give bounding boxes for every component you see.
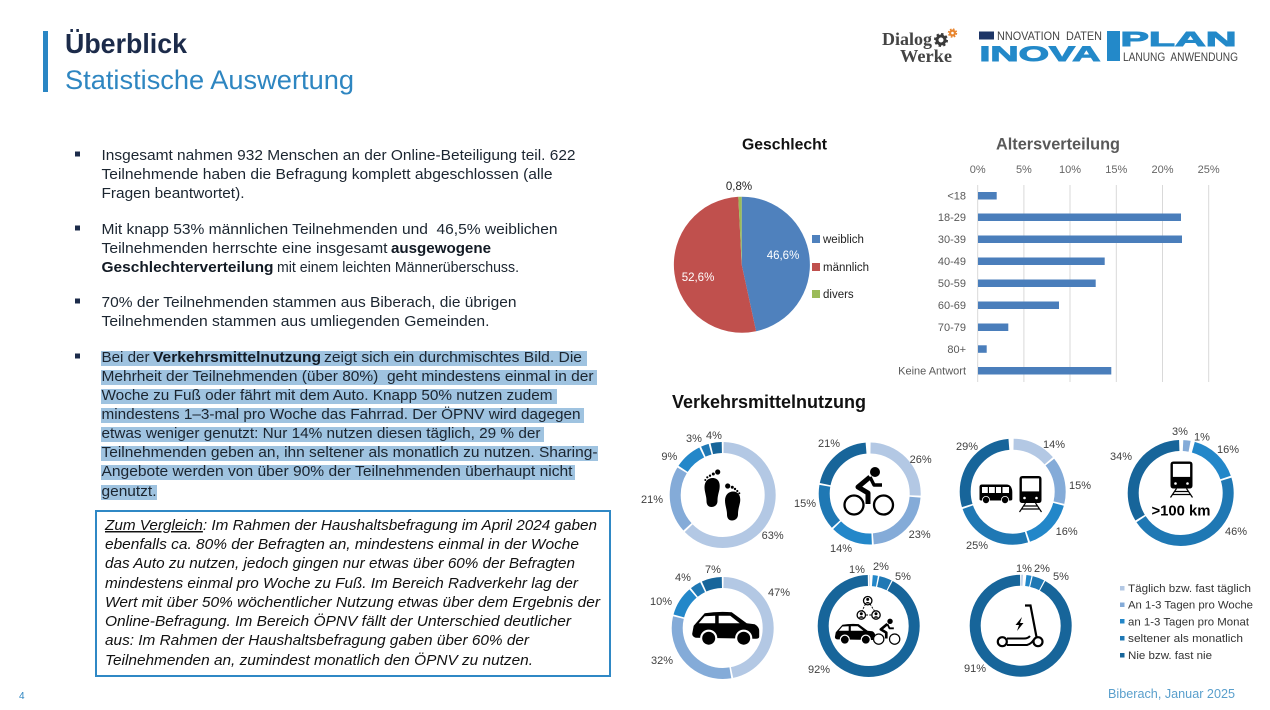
icon: train bbox=[1020, 476, 1042, 512]
donut: Fahrrad: 14% bbox=[830, 543, 852, 555]
bullet: Verkehrsmittelnutzung (highlighted): Bei der bbox=[102, 350, 150, 366]
icon: bike sharing bbox=[874, 619, 900, 644]
heading: Geschlecht: Geschlecht bbox=[742, 136, 828, 154]
bar chart: Altersverteilung: 50-59 bbox=[938, 278, 966, 290]
page number: 4 bbox=[19, 691, 25, 702]
logo: Dialog Werke: Dialog bbox=[882, 29, 932, 49]
donut: Fernverkehr über 100 km: 34% bbox=[1110, 451, 1132, 463]
bar chart: Altersverteilung: 20% bbox=[1151, 164, 1174, 176]
donut: Sharing Auto und Rad: 92% bbox=[808, 664, 830, 676]
donut: zu Fuß: 4% bbox=[706, 430, 722, 442]
donut: Sharing Auto und Rad: 1% bbox=[849, 564, 865, 576]
bar chart: Altersverteilung: <18 bbox=[947, 190, 966, 202]
donut: E-Scooter bbox=[964, 563, 1069, 675]
bullet: Verkehrsmittelnutzung (highlighted): genutzt. bbox=[102, 484, 156, 500]
legend: Nutzungshäufigkeit: An 1-3 Tagen pro Woche bbox=[1128, 600, 1253, 612]
donut: ÖPNV: 16% bbox=[1056, 526, 1078, 538]
callout: Zum Vergleich: Zum Vergleich : Im Rahmen der Haushaltsbefragung im April 2024 gaben bbox=[104, 518, 597, 534]
logo: Inova Plan bbox=[979, 29, 1238, 66]
donut: Sharing Auto und Rad bbox=[808, 561, 914, 676]
logo: Inova Plan: NNOVATION DATEN bbox=[997, 31, 1102, 43]
bullet: Verkehrsmittelnutzung (highlighted): Mehrheit der Teilnehmenden (über 80%) geht mindestens einmal in der bbox=[102, 369, 594, 385]
bar chart: Altersverteilung: 10% bbox=[1059, 164, 1081, 176]
donut: Fernverkehr über 100 km: 3% bbox=[1172, 426, 1188, 438]
donut: Sharing Auto und Rad: 2% bbox=[873, 561, 889, 573]
icon: footprints bbox=[704, 469, 740, 520]
bar chart: Altersverteilung: 18-29 bbox=[938, 212, 966, 224]
bar chart: Altersverteilung: 5% bbox=[1016, 164, 1032, 176]
donut: Fernverkehr über 100 km: 1% bbox=[1194, 432, 1210, 444]
donut: ÖPNV: 25% bbox=[966, 540, 988, 552]
callout: Zum Vergleich: Online-Befragung. Im Bereich ÖPNV fällt der Unterschied deutlicher bbox=[105, 612, 572, 630]
icon: long-distance train bbox=[1170, 462, 1192, 498]
donut: ÖPNV: 14% bbox=[1043, 439, 1065, 451]
donut: zu Fuß bbox=[641, 430, 784, 542]
bullet: Herkunft: 70% der Teilnehmenden stammen aus Biberach, die übrigen bbox=[102, 295, 516, 311]
donut: Auto: 32% bbox=[651, 655, 673, 667]
donut: Auto bbox=[650, 564, 790, 674]
donut: Fahrrad: 26% bbox=[910, 454, 932, 466]
donut: Sharing Auto und Rad: 5% bbox=[895, 571, 911, 583]
callout: Zum Vergleich: Teilnehmenden an, zumindest monatlich den ÖPNV zu nutzen. bbox=[105, 651, 533, 669]
bullet: Teilnahme: Insgesamt nahmen 932 Menschen an der Online-Beteiligung teil. 622 bbox=[102, 148, 576, 164]
bar chart: Altersverteilung: 60-69 bbox=[938, 300, 966, 312]
donut: ÖPNV: 15% bbox=[1069, 480, 1091, 492]
logo: Inova Plan: LANUNG ANWENDUNG bbox=[1123, 52, 1238, 64]
bullet: Verkehrsmittelnutzung (highlighted): mindestens 1–3-mal pro Woche das Fahrrad. Der ÖPNV wird dagegen bbox=[102, 405, 580, 423]
pie chart: Geschlecht: 0,8% bbox=[726, 181, 752, 193]
bullet: Geschlechterverteilung: mit einem leichten Männerüberschuss. bbox=[277, 260, 519, 276]
donut: Auto: 4% bbox=[675, 572, 691, 584]
bullet: Verkehrsmittelnutzung (highlighted): zeigt sich ein durchmischtes Bild. Die bbox=[324, 350, 582, 366]
donut: E-Scooter: 5% bbox=[1053, 571, 1069, 583]
bar chart: Altersverteilung: 30-39 bbox=[938, 234, 966, 246]
icon: e-scooter bbox=[998, 606, 1042, 646]
donut: E-Scooter: 91% bbox=[964, 663, 986, 675]
donut: Fernverkehr über 100 km: 16% bbox=[1217, 444, 1239, 456]
bar chart: Altersverteilung: 15% bbox=[1105, 164, 1128, 176]
bullet: Verkehrsmittelnutzung (highlighted): etwas weniger genutzt: Nur 14% nutzen diesen täglich, 29 % der bbox=[102, 426, 541, 442]
pie legend: weiblich bbox=[822, 234, 864, 246]
icon: sharing network bbox=[857, 596, 880, 619]
legend: Nutzungshäufigkeit: an 1-3 Tagen pro Monat bbox=[1128, 616, 1249, 628]
legend: Nutzungshäufigkeit bbox=[1120, 583, 1253, 662]
pie chart: Geschlecht: 52,6% bbox=[682, 272, 714, 284]
legend: Nutzungshäufigkeit: seltener als monatlich bbox=[1128, 633, 1243, 645]
legend: Nutzungshäufigkeit: Nie bzw. fast nie bbox=[1128, 650, 1212, 662]
logo: Inova Plan: PLAN bbox=[1120, 29, 1236, 51]
bar chart: Altersverteilung: 40-49 bbox=[938, 256, 966, 268]
bullet: Verkehrsmittelnutzung (highlighted): Teilnehmenden geben an, ihn seltener als monatlich zu nutzen. Sharing- bbox=[102, 445, 598, 461]
icon: bicycle bbox=[844, 467, 893, 514]
bullet: Geschlechterverteilung: Mit knapp 53% männlichen Teilnehmenden und 46,5% weiblichen bbox=[102, 222, 558, 238]
donut: ÖPNV bbox=[956, 439, 1091, 552]
logo: Inova Plan: INOVA bbox=[980, 43, 1100, 66]
donut: E-Scooter: 2% bbox=[1034, 563, 1050, 575]
legend: Nutzungshäufigkeit: Täglich bzw. fast täglich bbox=[1128, 583, 1251, 595]
donut: Fahrrad: 21% bbox=[818, 438, 840, 450]
heading: Verkehrsmittelnutzung: Verkehrsmittelnutzung bbox=[672, 392, 866, 412]
bullet: Herkunft: Teilnehmenden stammen aus umliegenden Gemeinden. bbox=[102, 314, 489, 330]
donut: Auto: 7% bbox=[705, 564, 721, 576]
donut: ÖPNV: 29% bbox=[956, 441, 978, 453]
bar chart: Altersverteilung: Keine Antwort bbox=[898, 366, 966, 378]
callout: Zum Vergleich: das Auto zu nutzen, jedoch gingen nur etwas über 60% der Befragten bbox=[105, 556, 575, 572]
bar chart: Altersverteilung: 70-79 bbox=[938, 322, 966, 334]
donut: Fahrrad: 23% bbox=[909, 529, 931, 541]
donut: Auto: 47% bbox=[768, 587, 790, 599]
pie chart: Geschlecht: 46,6% bbox=[767, 250, 799, 262]
bar chart: Altersverteilung: 80+ bbox=[947, 344, 966, 356]
bar chart: Altersverteilung: 0% bbox=[970, 164, 986, 176]
donut: zu Fuß: 3% bbox=[686, 433, 702, 445]
icon: car bbox=[692, 612, 759, 647]
bullet: Teilnahme bbox=[75, 148, 576, 202]
pie legend: männlich bbox=[823, 262, 869, 274]
callout: Zum Vergleich: ebenfalls ca. 80% der Befragten an, mindestens einmal in der Woche bbox=[105, 537, 579, 553]
title: Überblick bbox=[65, 28, 187, 59]
donut: E-Scooter: 1% bbox=[1016, 563, 1032, 575]
donut: zu Fuß: 63% bbox=[762, 530, 784, 542]
donut: Fahrrad: 15% bbox=[794, 498, 816, 510]
donut: zu Fuß: 21% bbox=[641, 494, 663, 506]
donut: Fernverkehr über 100 km: 46% bbox=[1225, 526, 1247, 538]
bullet: Geschlechterverteilung: Geschlechterverteilung bbox=[102, 260, 274, 276]
donut: zu Fuß: 9% bbox=[661, 451, 677, 463]
subtitle: Statistische Auswertung bbox=[65, 65, 354, 95]
icon: car sharing bbox=[835, 624, 875, 645]
bullet: Verkehrsmittelnutzung (highlighted): Woche zu Fuß oder fährt mit dem Auto. Knapp 50% nutzen zudem bbox=[102, 388, 552, 404]
header accent bar bbox=[43, 31, 48, 92]
icon: bus bbox=[980, 484, 1012, 504]
bullet: Geschlechterverteilung bbox=[75, 222, 558, 276]
footer date: Biberach, Januar 2025 bbox=[1108, 687, 1235, 701]
donut: Fahrrad bbox=[794, 438, 932, 555]
pie legend: divers bbox=[823, 289, 854, 301]
callout: Zum Vergleich: aus: Im Rahmen der Haushaltsbefragung gaben über 60% der bbox=[105, 633, 530, 649]
pie chart: Geschlecht bbox=[674, 181, 810, 333]
label: >100 km: >100 km bbox=[1152, 502, 1210, 520]
bar chart: Altersverteilung: 25% bbox=[1198, 164, 1220, 176]
bullet: Teilnahme: Fragen beantwortet). bbox=[102, 186, 244, 202]
heading: Altersverteilung: Altersverteilung bbox=[996, 136, 1120, 154]
bullet: Herkunft bbox=[75, 295, 516, 330]
bar chart: Altersverteilung bbox=[898, 164, 1220, 382]
logo: Dialog Werke bbox=[882, 29, 956, 66]
bullet: Teilnahme: Teilnehmende haben die Befragung komplett abgeschlossen (alle bbox=[102, 167, 552, 183]
pie legend bbox=[812, 234, 869, 301]
donut: Auto: 10% bbox=[650, 596, 672, 608]
callout: Zum Vergleich: Wert mit über 50% wöchentlicher Nutzung etwas über dem Ergebnis der bbox=[105, 595, 601, 611]
bullet: Geschlechterverteilung: ausgewogene bbox=[391, 241, 491, 257]
donut: Fernverkehr über 100 km bbox=[1110, 426, 1247, 540]
bullet: Verkehrsmittelnutzung (highlighted) bbox=[75, 350, 598, 500]
bullet: Verkehrsmittelnutzung (highlighted): Angebote werden von über 90% der Teilnehmenden überhaupt nicht bbox=[102, 464, 572, 480]
bullet: Geschlechterverteilung: Teilnehmenden herrschte eine insgesamt bbox=[102, 241, 388, 257]
callout: Zum Vergleich bbox=[96, 511, 610, 676]
callout: Zum Vergleich: mindestens einmal pro Woche zu Fuß. Im Bereich Radverkehr lag der bbox=[105, 576, 579, 592]
bullet: Verkehrsmittelnutzung (highlighted): Verkehrsmittelnutzung bbox=[153, 350, 321, 366]
logo: Dialog Werke: Werke bbox=[900, 46, 952, 66]
